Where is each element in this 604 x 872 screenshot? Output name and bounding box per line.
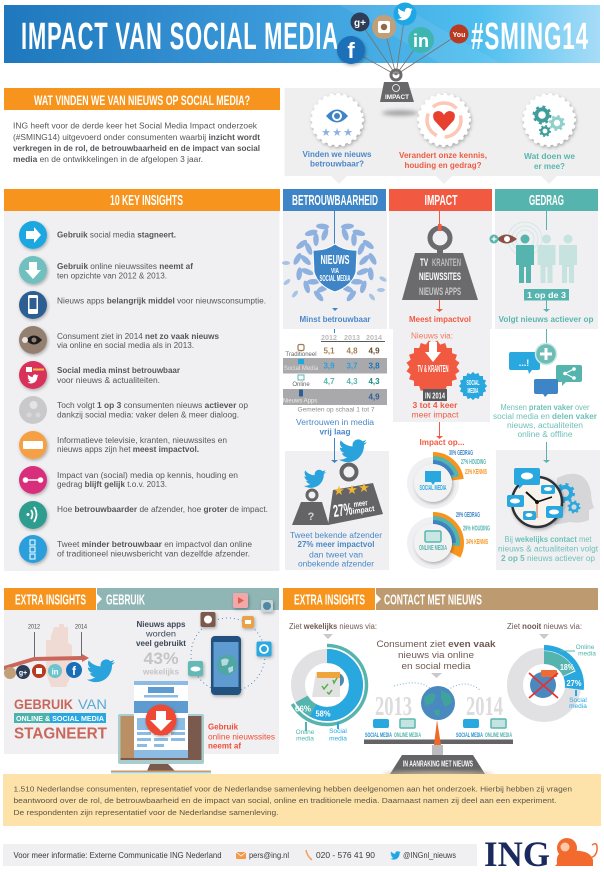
label: 1 op de 3: 1 op de 3: [527, 291, 567, 300]
question: vinden we nieuws betrouwbaar: Vinden we nieuws: [302, 150, 372, 159]
insight 8: [19, 466, 238, 494]
text: gebruik online nieuwssites: Gebruik: [208, 722, 239, 732]
label: in aanraking met nieuws: IN AANRAKING MET NIEUWS: [403, 760, 473, 768]
heading: extra insights gebruik: EXTRA INSIGHTS: [15, 592, 86, 608]
table note: Gemeten op schaal 1 tot 7: [298, 406, 375, 414]
insight 2: Gebruik online nieuwssites neemt af: [57, 262, 193, 271]
text: gebruik online nieuwssites: online nieuwssites: [208, 732, 275, 742]
icon badge: eye and stars: ★: [321, 126, 331, 139]
footer contact bar: 020 - 576 41 90: [316, 850, 375, 860]
icon: big weight: meer: [353, 498, 368, 509]
icons: social row: in: [51, 668, 59, 676]
icon: laurel wreath: [282, 218, 387, 304]
text: 3 tot 4 keer: 3 tot 4 keer: [412, 401, 458, 410]
text: nieuws apps: worden: [145, 630, 176, 638]
labels: 34% KENNIS: [466, 539, 488, 546]
label: minst betrouwbaar: Minst betrouwbaar: [300, 315, 370, 324]
text: tweet bekende afzender: [290, 531, 382, 568]
icon: globe: [421, 686, 455, 720]
icon: chat bubbles: [509, 329, 582, 397]
icon badge: eye and stars: ★: [332, 126, 342, 139]
panel: nieuws via: [393, 329, 490, 422]
panel: intro right grey: [284, 88, 600, 176]
balance: 2013 and 2014: ONLINE MEDIA: [394, 732, 421, 739]
chart: wekelijks donut: 58%: [316, 710, 330, 718]
icon: weight IMPACT: IMPACT: [385, 94, 409, 101]
intro text block: [13, 122, 260, 164]
question: wat doen we: Wat doen we: [524, 152, 576, 161]
question: verandert onze kennis: Verandert onze kennis,: [399, 151, 487, 160]
text: gebruik van stagneert: ONLINE & SOCIAL MEDIA: [16, 716, 104, 723]
labels: Online: [576, 644, 595, 651]
heading: 10 key insights: [4, 189, 280, 211]
icon: crossed globe: [529, 670, 558, 698]
icon: google plus: g+: [354, 18, 366, 29]
insight 10: Tweet minder betrouwbaar en impactvol dan online: [57, 540, 253, 549]
icon: dotted orbit: [191, 618, 265, 692]
question: verandert onze kennis: [399, 151, 487, 170]
balance: 2013 and 2014: ONLINE MEDIA: [485, 732, 512, 739]
text: mensen praten vaker: [493, 403, 597, 439]
logo: ING with lion: [484, 834, 597, 872]
labels: [449, 450, 487, 476]
balance: 2013 and 2014: 2014: [466, 691, 503, 721]
question: vinden we nieuws betrouwbaar: [302, 150, 372, 168]
panel: methodology note: [3, 774, 601, 826]
label: meest impactvol: Meest impactvol: [409, 315, 471, 324]
panel: tweet weights: [285, 438, 389, 570]
panel: gebruik: [4, 593, 279, 754]
footer contact bar: Voor meer informatie: Externe Communicatie ING Nederland: [14, 850, 222, 860]
panel: gedrag people: [490, 211, 598, 329]
icon: shield: NIEUWS: [320, 252, 350, 267]
heading: extra insights gebruik: [4, 588, 279, 610]
text: gebruik online nieuwssites: [208, 722, 275, 750]
icon: big weight: impact: [352, 504, 375, 516]
table: vertrouwen per medium: 3,7: [346, 362, 358, 370]
icon: clock: [512, 477, 562, 527]
insight 5: voor nieuws & actualiteiten.: [57, 376, 160, 385]
text: wekelijks contact: Bij wekelijks contact met: [504, 535, 592, 544]
icon: big weight with media: [402, 228, 478, 300]
icon: monitor with website: [111, 681, 211, 774]
insight 7: nieuws apps zijn het meest impactvol.: [57, 445, 199, 454]
insight 5: Social media minst betrouwbaar: [57, 366, 180, 375]
table: vertrouwen per medium: 4,8: [346, 346, 358, 356]
pointers under intro panel: [331, 176, 557, 184]
labels: [456, 512, 490, 546]
balance: 2013 and 2014: [364, 683, 513, 774]
intro text block: verkregen in de rol, de betrouwbaarheid en de impact van social: [13, 144, 260, 153]
icon: burst social media: [459, 372, 487, 400]
insight 4: Consument ziet in 2014 net zo vaak nieuws: [57, 332, 220, 341]
panel: methodology note: De respondenten zijn representatief voor de Nederlandse samenleving.: [14, 808, 278, 817]
labels: 29% HOUDING: [463, 526, 490, 532]
intro text block: media en de ontwikkelingen in de afgelopen 3 jaar.: [13, 155, 203, 164]
timeline arrow: [4, 624, 89, 670]
icon: burst tv en kranten: TV & KRANTEN: [418, 363, 448, 375]
text: vertrouwen in media: Vertrouwen in media: [296, 418, 375, 427]
icon: calendar and globe: [312, 672, 344, 697]
insight 2: [19, 256, 193, 284]
chart: wekelijks donut: [288, 646, 366, 742]
text: mensen praten vaker: nieuws, actualiteiten: [507, 421, 583, 430]
text: mensen praten vaker: social media en delen vaker: [493, 412, 597, 421]
label: impact op: Impact op...: [420, 438, 464, 447]
text: wekelijks contact: [498, 535, 599, 563]
insight 4: via online en social media als in 2013.: [57, 341, 194, 350]
table: vertrouwen per medium: 4,3: [368, 377, 380, 386]
insight 9: [19, 501, 268, 529]
heading: gedrag: [495, 189, 598, 211]
icons: social row: f: [72, 664, 77, 678]
label: in 2014: IN 2014: [425, 390, 445, 400]
icon: big weight: 27%: [332, 500, 353, 521]
heading: impact: IMPACT: [424, 193, 458, 209]
icon: burst social media: MEDIA: [468, 386, 479, 395]
chart: wekelijks donut: 66%: [295, 704, 311, 714]
icon: instagram: [372, 15, 396, 39]
icon: big weight with media: KRANTEN: [432, 257, 461, 269]
icon: burst social media: SOCIAL: [466, 378, 480, 387]
label: ziet wekelijks: Ziet wekelijks nieuws via:: [289, 622, 377, 631]
intro text block: ING heeft voor de derde keer het Social Media Impact onderzoek: [13, 122, 258, 130]
labels: media: [578, 650, 596, 658]
table: vertrouwen per medium: Online: [292, 382, 310, 388]
text: vertrouwen in media: vrij laag: [320, 428, 351, 436]
insight 10: of traditioneel nieuwsbericht van dezelfde afzender.: [57, 550, 250, 558]
icon: big weight: ★: [333, 484, 345, 499]
labels: media: [329, 736, 347, 742]
text: gebruik online nieuwssites: neemt af: [208, 742, 241, 750]
insight 1: Gebruik social media stagneert.: [57, 230, 176, 240]
icons: social row: [4, 659, 115, 682]
icon: eye and plus: [490, 234, 517, 244]
icon: phone: [211, 636, 241, 695]
chart: nooit donut: 18%: [560, 663, 574, 672]
text: nieuws apps: wekelijks: [142, 668, 180, 676]
icon: shield: SOCIAL MEDIA: [320, 274, 351, 283]
heading: impact: [389, 189, 492, 211]
text: consument ziet even vaak: nieuws via online: [398, 650, 474, 660]
labels: Social: [329, 728, 347, 735]
labels: Online: [296, 729, 315, 736]
footer contact bar: [3, 844, 477, 866]
icon: youtube: You: [453, 32, 465, 39]
insight 6: dankzij social media: vaker delen & meer dialoog.: [57, 410, 239, 420]
insight 3: Nieuws apps belangrijk middel voor nieuwsconsumptie.: [57, 296, 266, 306]
insight 8: gedrag blijft gelijk t.o.v. 2013.: [57, 480, 167, 489]
icon badge: gears: [524, 95, 574, 145]
insight 5: [19, 361, 180, 389]
text: wekelijks contact: nieuws & actualiteiten volgt: [498, 544, 599, 554]
icon: radar circles: [508, 222, 542, 256]
text: gebruik van stagneert: GEBRUIK: [14, 696, 73, 712]
icon: shield: [313, 244, 357, 292]
insight 10: [19, 535, 253, 563]
text: tweet bekende afzender: Tweet bekende afzender: [290, 531, 382, 540]
title: IMPACT VAN SOCIAL MEDIA: [21, 16, 339, 58]
insight 1: [19, 221, 176, 249]
social media weight with icons: [337, 2, 468, 116]
labels: media: [569, 703, 587, 710]
footer contact bar: pers@ing.nl: [249, 850, 289, 860]
icon: news bubbles: [507, 468, 563, 520]
table: vertrouwen per medium: Traditioneel: [285, 352, 317, 358]
panel: betrouwbaarheid shield: [282, 211, 387, 329]
table: vertrouwen per medium: 4,7: [323, 377, 335, 386]
icon: big weight: ★: [346, 483, 358, 498]
text: wekelijks contact: 2 op 5 nieuws actiever op: [501, 554, 596, 563]
text: nieuws apps: Nieuws apps: [136, 620, 186, 629]
chart: impact online media: [407, 512, 490, 569]
label: ziet nooit: Ziet nooit nieuws via:: [507, 622, 582, 631]
icon: twitter birds: [304, 439, 367, 488]
icon: shield: VIA: [331, 268, 339, 275]
labels: 29% GEDRAG: [456, 512, 480, 519]
labels: 27% HOUDING: [461, 459, 486, 466]
icon: hand: [46, 624, 72, 687]
heading: betrouwbaarheid: [283, 189, 386, 211]
heading: extra insights contact: EXTRA INSIGHTS: [294, 592, 365, 608]
table: vertrouwen per medium: 4,3: [346, 377, 358, 386]
panel: wekelijks contact clock: [496, 442, 600, 570]
text: tweet bekende afzender: dan tweet van: [309, 550, 363, 560]
timeline arrow: 2014: [75, 624, 88, 630]
text: gebruik van stagneert: [14, 696, 108, 742]
icon: three people: [516, 234, 577, 283]
icons: app tiles: [188, 593, 273, 676]
label: in aanraking met nieuws: [390, 755, 485, 774]
insight 7: Informatieve televisie, kranten, nieuwssites en: [57, 436, 227, 445]
heading: wat vinden we: [4, 88, 280, 110]
heading: betrouwbaarheid: BETROUWBAARHEID: [292, 193, 378, 209]
icon: phone: [306, 850, 312, 860]
heading: extra insights contact: [283, 588, 598, 610]
icon: small weight: ?: [308, 511, 315, 523]
table: vertrouwen per medium: 2014: [366, 335, 382, 342]
panel: impact weight: [389, 211, 492, 329]
table: vertrouwen per medium: 5,1: [323, 346, 335, 356]
table: vertrouwen per medium: 4,9: [368, 392, 380, 402]
icon: mail: [236, 852, 246, 859]
heading: extra insights contact: CONTACT MET NIEUWS: [384, 592, 482, 608]
text: 3 tot 4 keer: meer impact: [412, 410, 459, 420]
text: consument ziet even vaak: [376, 639, 497, 671]
chart: impact online media: ONLINE MEDIA: [419, 545, 447, 552]
header banner: [4, 5, 600, 63]
icons: bubbles and monitors: [373, 719, 506, 728]
text: mensen praten vaker: online & offline: [518, 430, 573, 439]
heading: wat vinden we: WAT VINDEN WE VAN NIEUWS OP SOCIAL MEDIA?: [34, 92, 250, 108]
balance: 2013 and 2014: SOCIAL MEDIA: [365, 732, 392, 739]
question: wat doen we: er mee?: [534, 162, 565, 171]
insight 6: Toch volgt 1 op 3 consumenten nieuws actiever op: [57, 401, 249, 410]
labels: 30% GEDRAG: [449, 450, 473, 457]
table: vertrouwen per medium: Social Media: [284, 366, 319, 372]
chart: nooit donut: 27%: [566, 679, 582, 688]
insight 6: [19, 396, 249, 424]
table: vertrouwen per medium: 3,9: [323, 362, 335, 370]
text: gebruik van stagneert: STAGNEERT: [14, 726, 108, 742]
text: nieuws apps: veel gebruikt: [136, 639, 186, 648]
text: tweet bekende afzender: 27% meer impactvol: [298, 540, 374, 549]
panel: methodology note: beantwoord over de rol, de betrouwbaarheid en de impact van social, online en traditionele media. Daarnaast namen zij deel aan een experiment.: [14, 796, 556, 805]
labels: [569, 644, 596, 710]
icon: linkedin: in: [413, 31, 429, 51]
heading: gedrag: GEDRAG: [529, 193, 564, 209]
icon: big weight: ★: [358, 481, 370, 496]
heading: 10 key insights: 10 KEY INSIGHTS: [110, 193, 183, 209]
panel: 10 key insights: [4, 211, 280, 571]
panel: methodology note: 1.510 Nederlandse consumenten, representatief voor de Nederlandse samenleving hebben deelgenomen aan het onderzoek. Hierbij hebben zij vragen: [14, 784, 572, 794]
icon badge: heart with arrows: [419, 95, 469, 145]
panel: nieuws via: Nieuws via:: [411, 332, 453, 340]
icon: lion: [555, 838, 597, 866]
question: vinden we nieuws betrouwbaar: betrouwbaar?: [310, 160, 364, 168]
insight 9: Hoe betrouwbaarder de afzender, hoe groter de impact.: [57, 505, 268, 514]
table: vertrouwen per medium: 4,9: [368, 346, 380, 356]
footer contact bar: @INGnl_nieuws: [403, 850, 456, 860]
insight 2: ten opzichte van 2012 & 2013.: [57, 272, 167, 280]
balance: 2013 and 2014: SOCIAL MEDIA: [456, 732, 483, 739]
icon: big weight: [328, 464, 383, 525]
heading: extra insights gebruik: GEBRUIK: [106, 592, 145, 608]
labels: media: [296, 736, 314, 742]
text: 3 tot 4 keer: [412, 401, 459, 420]
chart: impact social media: [407, 450, 487, 509]
icon: chat bubbles: ...!: [519, 358, 529, 368]
icon: big weight with media: NIEUWS APPS: [419, 286, 461, 298]
text: consument ziet even vaak: en social media: [402, 661, 470, 671]
labels: Social: [569, 697, 587, 704]
text: tweet bekende afzender: onbekende afzender: [298, 560, 374, 568]
icon badge: eye and stars: [312, 95, 362, 145]
question: wat doen we: [524, 152, 576, 171]
icon: head with gears: [554, 474, 594, 525]
icon: facebook: f: [347, 38, 355, 63]
icon badge: eye and stars: ★: [343, 126, 353, 139]
icons: social row: g+: [19, 670, 27, 677]
balance: 2013 and 2014: 2013: [375, 691, 412, 721]
timeline arrow: 2012: [28, 624, 41, 630]
chart: nooit donut: [514, 644, 596, 716]
insight 3: [19, 291, 266, 319]
icon: big weight with media: NIEUWSSITES: [419, 271, 461, 283]
insight 7: [19, 431, 227, 459]
text: mensen praten vaker: Mensen praten vaker over: [500, 403, 590, 412]
table: vertrouwen per medium: 2013: [344, 335, 360, 342]
table: vertrouwen per medium: 2012: [321, 335, 337, 342]
icon: download arrow: [146, 704, 176, 736]
text: nieuws apps: 43%: [144, 649, 178, 668]
text: consument ziet even vaak: Consument ziet even vaak: [376, 639, 497, 649]
insight 8: Impact van (social) media op kennis, houding en: [57, 471, 238, 480]
labels: 23% KENNIS: [465, 469, 487, 476]
table: vertrouwen per medium: [283, 329, 387, 405]
label: volgt nieuws actiever op: Volgt nieuws actiever op: [498, 315, 594, 324]
intro text block: (#SMING14) uitgevoerd onder consumenten waarbij inzicht wordt: [13, 133, 260, 142]
text: nieuws apps: [136, 620, 186, 676]
icon: big weight with media: TV: [420, 257, 428, 269]
text: vertrouwen in media: [296, 418, 375, 436]
chart: impact social media: SOCIAL MEDIA: [420, 485, 446, 492]
table: vertrouwen per medium: 3,8: [368, 362, 380, 370]
icon: twitter: [394, 2, 416, 26]
question: verandert onze kennis: houding en gedrag?: [404, 161, 482, 170]
insight 4: [19, 326, 220, 354]
table: vertrouwen per medium: Nieuws Apps: [283, 398, 317, 404]
icon: twitter: [390, 851, 401, 860]
text: gebruik van stagneert: VAN: [78, 696, 107, 712]
labels: [296, 728, 347, 742]
